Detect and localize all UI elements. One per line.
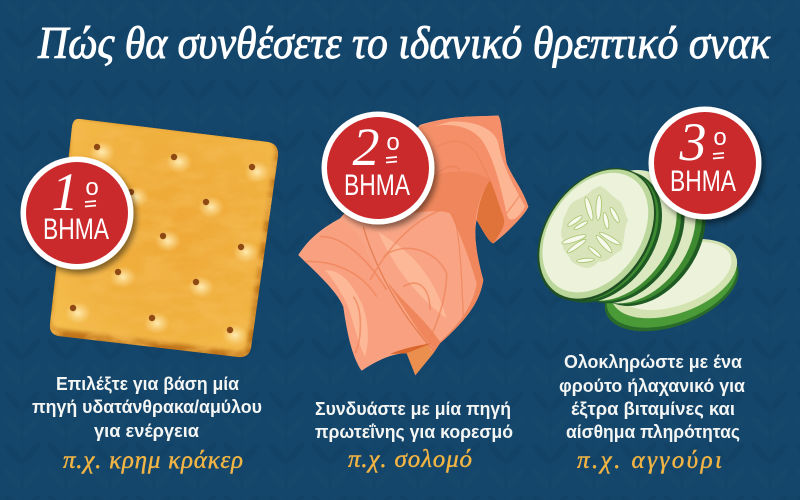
badge: step 1: ΒΗΜΑ xyxy=(43,213,109,246)
text: step 2 description xyxy=(315,399,513,442)
text: step 3 example: π.χ. αγγούρι xyxy=(577,447,722,474)
icon: salmon xyxy=(298,116,528,375)
badge: step 3: ο xyxy=(713,124,727,151)
badge: step 2 xyxy=(322,112,434,224)
badge: step 1: ο xyxy=(85,174,99,201)
badge: step 1: 1 xyxy=(52,162,78,222)
text: step 1 description: πηγή υδατάνθρακα/αμύλου xyxy=(32,397,262,417)
icon: cracker xyxy=(45,115,285,360)
text: step 3 description: Ολοκληρώστε με ένα xyxy=(564,352,742,372)
badge: step 2: ο xyxy=(386,129,400,156)
text: step 3 description: αίσθημα πληρότητας xyxy=(566,422,740,442)
badge: step 2: ΒΗΜΑ xyxy=(344,169,410,202)
icon: cucumber slices xyxy=(513,145,750,348)
badge: step 3: ΒΗΜΑ xyxy=(670,165,736,198)
badge: step 3: 3 xyxy=(678,112,706,172)
cucumber stack xyxy=(520,148,730,328)
panel: step 1 cracker xyxy=(20,115,285,474)
text: step 3 description: φρούτο ήλαχανικό για xyxy=(559,376,745,396)
text: step 3 description: έξτρα βιταμίνες και xyxy=(571,399,735,420)
text: step 2 description: πρωτεΐνης για κορεσμό xyxy=(315,422,513,442)
panel: step 3 cucumber xyxy=(513,106,762,474)
badge: step 1 xyxy=(20,156,134,270)
text: step 2 description: Συνδυάστε με μία πηγή xyxy=(315,399,511,419)
text: step 1 description: για ενέργεια xyxy=(94,421,199,441)
badge: step 3 xyxy=(648,106,762,220)
cucumber front slice xyxy=(513,145,681,324)
cucumber back slice xyxy=(593,224,750,348)
text: step 1 description xyxy=(32,374,262,441)
text: step 1 description: Επιλέξτε για βάση μία xyxy=(56,374,239,395)
panel: step 2 salmon xyxy=(298,112,528,473)
text: step 3 description xyxy=(559,352,745,442)
badge: step 2: 2 xyxy=(352,117,380,177)
text: step 1 example: π.χ. κρημ κράκερ xyxy=(63,447,243,474)
text: step 2 example: π.χ. σολομό xyxy=(348,446,472,473)
